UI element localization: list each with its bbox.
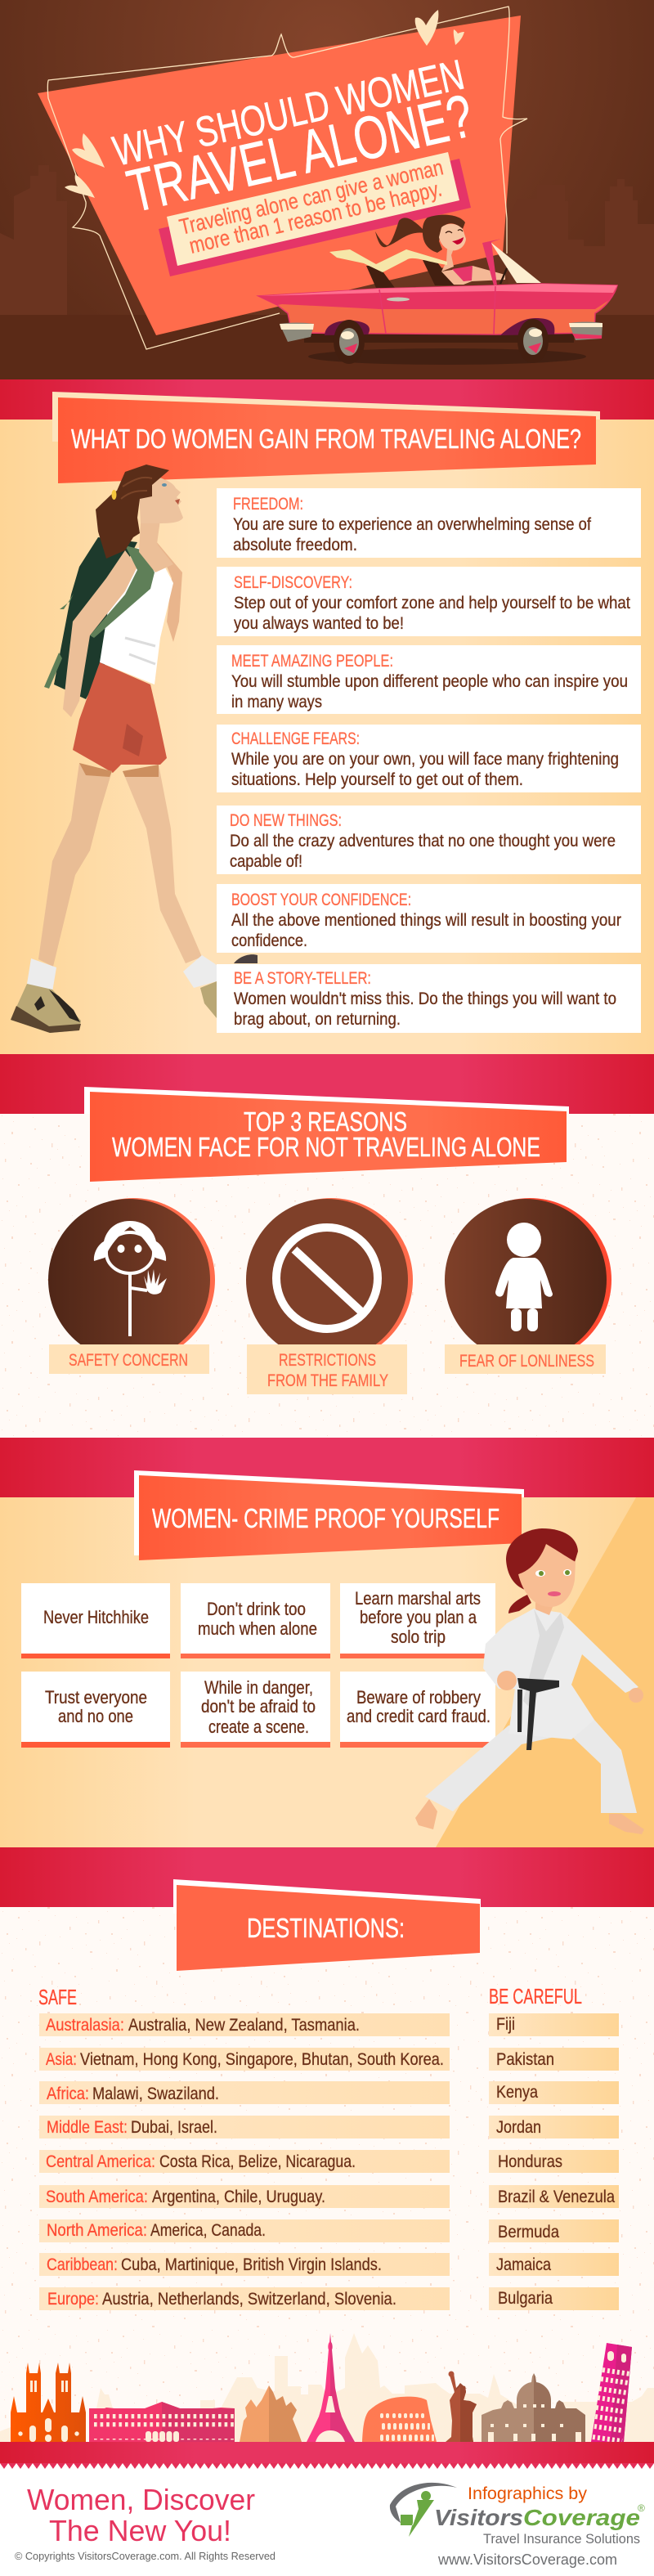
- hand-drawn outline: [47, 7, 527, 349]
- footer: logo: www.VisitorsCoverage.com: [437, 2551, 617, 2568]
- row: africa: Malawi, Swaziland.: [92, 2085, 219, 2103]
- row: europe: Austria, Netherlands, Switzerland, Slovenia.: [102, 2290, 396, 2309]
- footer: slogan: [27, 2483, 255, 2547]
- row: asia: Vietnam, Hong Kong, Singapore, Bhutan, South Korea.: [80, 2050, 444, 2069]
- column: be careful: Honduras: [498, 2152, 562, 2171]
- card: meet amazing people: [217, 645, 641, 714]
- tip: beware of robbery: [340, 1672, 495, 1748]
- landmark: st basil's: [240, 2385, 302, 2442]
- tip: trust everyone: [21, 1672, 170, 1748]
- panel: destinations: [38, 1879, 619, 2310]
- tip: create a scene: While in danger,: [204, 1677, 313, 1698]
- card: do new things: DO NEW THINGS:: [230, 811, 342, 830]
- row: north america: North America:: [47, 2221, 147, 2240]
- landmarks skyline: [0, 2333, 654, 2442]
- card: self-discovery: [217, 567, 641, 636]
- heading banner: [84, 1087, 569, 1182]
- reason: fear of lonliness: FEAR OF LONLINESS: [459, 1352, 594, 1371]
- tip: marshal arts: solo trip: [391, 1627, 446, 1647]
- tip: never hitchhike: Never Hitchhike: [43, 1607, 149, 1627]
- card: challenge fears: [217, 725, 641, 792]
- icon: prohibited sign: [276, 1227, 378, 1329]
- row: africa: [39, 2081, 450, 2104]
- row: south america: [39, 2185, 450, 2208]
- icon: woman with raised hand: [94, 1221, 167, 1336]
- tip: create a scene: [181, 1672, 330, 1748]
- row: middle east: Middle East:: [47, 2118, 128, 2137]
- tip: marshal arts: Learn marshal arts: [355, 1588, 481, 1609]
- footer: copyright: © Copyrights VisitorsCoverage.com. All Rights Reserved: [15, 2550, 275, 2562]
- card: freedom: FREEDOM:: [233, 495, 303, 514]
- card: be a story-teller: Women wouldn't miss this. Do the things you will want to: [234, 990, 616, 1008]
- row: caribbean: Caribbean:: [47, 2255, 118, 2274]
- car with woman driver: [258, 215, 617, 365]
- figure: karate woman: [415, 1528, 644, 1834]
- panel: top 3 reasons: [48, 1087, 611, 1394]
- reason: safety concern: [48, 1198, 215, 1374]
- card: do new things: capable of!: [230, 852, 302, 871]
- row: africa: Africa:: [47, 2085, 89, 2103]
- band: zigzag divider: [0, 2442, 654, 2469]
- landmark: colosseum: [362, 2397, 437, 2442]
- card: boost your confidence: confidence.: [231, 931, 307, 950]
- landmark: statue of liberty: [446, 2372, 477, 2442]
- card: self-discovery: SELF-DISCOVERY:: [234, 573, 352, 592]
- panel: crime proof: [21, 1470, 644, 1834]
- windscreen: [490, 242, 541, 283]
- heading banner: DESTINATIONS:: [247, 1913, 405, 1943]
- card: do new things: [217, 806, 641, 874]
- row: central america: [39, 2150, 450, 2173]
- reason: restrictions from the family: RESTRICTIONS: [279, 1351, 376, 1370]
- woman: [441, 266, 505, 285]
- road: [0, 315, 654, 379]
- card: be a story-teller: brag about, on returning.: [234, 1010, 401, 1029]
- column: be careful: Kenya: [496, 2083, 538, 2102]
- column: be careful: Jamaica: [496, 2255, 551, 2274]
- column: be careful: BE CAREFUL: [489, 1984, 582, 2008]
- tip: don't drink: Don't drink too: [207, 1599, 306, 1619]
- heading banner: [173, 1879, 481, 1971]
- hearts: [65, 10, 464, 198]
- row: central america: Central America:: [46, 2152, 155, 2171]
- card: meet amazing people: in many ways: [231, 693, 322, 711]
- tip: create a scene: create a scene.: [208, 1717, 309, 1737]
- row: north america: [39, 2219, 450, 2242]
- card: do new things: Do all the crazy adventures that no one thought you were: [230, 832, 616, 850]
- heading banner: [52, 392, 600, 483]
- pale background city: [0, 2333, 654, 2442]
- reason: fear of lonliness: [445, 1198, 611, 1374]
- body: [258, 284, 617, 334]
- subtitle banner: more than 1 reason to be happy.: [187, 177, 444, 258]
- row: europe: [39, 2287, 450, 2310]
- row: australasia: Australia, New Zealand, Tasmania.: [128, 2016, 360, 2035]
- tip: trust everyone: and no one: [58, 1706, 133, 1726]
- footer: logo: ®: [638, 2502, 645, 2514]
- column: safe: SAFE: [38, 1985, 77, 2009]
- subtitle banner: Traveling alone can give a woman: [177, 155, 446, 240]
- column: be careful: Brazil & Venezula: [498, 2188, 615, 2206]
- city skyline silhouette: [0, 165, 654, 315]
- wheels: [325, 321, 370, 335]
- panel: what women gain: [11, 392, 641, 1033]
- footer: logo: [390, 2483, 645, 2568]
- card: boost your confidence: BOOST YOUR CONFIDENCE:: [231, 891, 411, 909]
- row: australasia: Australasia:: [46, 2016, 124, 2035]
- landmark: palace: [89, 2402, 235, 2442]
- row: caribbean: [39, 2253, 450, 2276]
- tip: never hitchhike: [21, 1583, 170, 1658]
- tip: beware of robbery: and credit card fraud.: [347, 1706, 490, 1726]
- orange title shape: [38, 16, 521, 335]
- heading banner: [134, 1470, 524, 1560]
- card: be a story-teller: [217, 964, 641, 1033]
- row: asia: Asia:: [46, 2050, 77, 2069]
- tip: trust everyone: Trust everyone: [45, 1687, 147, 1708]
- icon: lone girl: [495, 1223, 553, 1331]
- reason: restrictions from the family: [246, 1198, 413, 1394]
- card: boost your confidence: [217, 884, 641, 953]
- row: middle east: [39, 2116, 450, 2138]
- tip: marshal arts: before you plan a: [360, 1607, 477, 1627]
- row: north america: America, Canada.: [150, 2221, 266, 2240]
- card: freedom: absolute freedom.: [233, 536, 357, 554]
- card: freedom: You are sure to experience an overwhelming sense of: [233, 515, 591, 534]
- row: central america: Costa Rica, Belize, Nicaragua.: [159, 2152, 356, 2171]
- column: be careful: Fiji: [496, 2015, 515, 2034]
- row: asia: [39, 2048, 450, 2071]
- title: WHY SHOULD WOMEN: [109, 52, 468, 176]
- tip: marshal arts: [340, 1583, 495, 1658]
- subtitle banner: [159, 152, 471, 276]
- title: TRAVEL ALONE?: [121, 81, 479, 226]
- row: australasia: [39, 2013, 450, 2036]
- row: caribbean: Cuba, Martinique, British Virgin Islands.: [121, 2255, 382, 2274]
- footer: logo: Infographics by: [468, 2484, 588, 2503]
- icon: visitors coverage mark: [390, 2483, 457, 2537]
- column: safe: [38, 1985, 450, 2310]
- landmark: eiffel tower: [307, 2333, 355, 2442]
- card: challenge fears: situations. Help yourself to get out of them.: [231, 770, 523, 789]
- card: challenge fears: CHALLENGE FEARS:: [231, 729, 360, 748]
- heading banner: WOMEN- CRIME PROOF YOURSELF: [152, 1503, 499, 1533]
- tip: create a scene: don't be afraid to: [201, 1696, 316, 1717]
- card: meet amazing people: MEET AMAZING PEOPLE:: [231, 652, 393, 671]
- lights: [280, 322, 314, 342]
- landmark: leaning tower of pisa: [591, 2343, 632, 2442]
- landmark: church: [11, 2363, 86, 2442]
- card: freedom: [217, 488, 641, 558]
- tip: don't drink: [181, 1583, 330, 1658]
- row: south america: Argentina, Chile, Uruguay.: [152, 2188, 325, 2206]
- panel: hero: [0, 0, 654, 379]
- tip: don't drink: much when alone: [198, 1618, 317, 1639]
- footer: logo: Travel Insurance Solutions: [483, 2531, 640, 2547]
- heading banner: TOP 3 REASONS: [244, 1106, 407, 1137]
- row: europe: Europe:: [47, 2290, 99, 2309]
- column: be careful: Bermuda: [498, 2223, 559, 2242]
- row: middle east: Dubai, Israel.: [131, 2118, 217, 2137]
- card: be a story-teller: BE A STORY-TELLER:: [234, 969, 371, 988]
- landmark: st peter's: [482, 2373, 585, 2442]
- column: be careful: Pakistan: [496, 2050, 554, 2069]
- figure: backpacker woman: [11, 464, 258, 1033]
- column: be careful: [489, 1984, 619, 2310]
- footer: logo: Coverage: [523, 2505, 640, 2530]
- card: self-discovery: you always wanted to be!: [234, 614, 404, 633]
- column: be careful: Jordan: [496, 2118, 541, 2137]
- footer: slogan: Women, Discover: [27, 2483, 255, 2516]
- tip: beware of robbery: Beware of robbery: [356, 1687, 481, 1708]
- footer: slogan: The New You!: [49, 2514, 231, 2547]
- reason: restrictions from the family: FROM THE FAMILY: [267, 1371, 388, 1390]
- column: be careful: Bulgaria: [498, 2289, 553, 2308]
- row: south america: South America:: [46, 2188, 148, 2206]
- reason: safety concern: SAFETY CONCERN: [69, 1351, 188, 1370]
- footer: logo: Visitors: [434, 2505, 523, 2530]
